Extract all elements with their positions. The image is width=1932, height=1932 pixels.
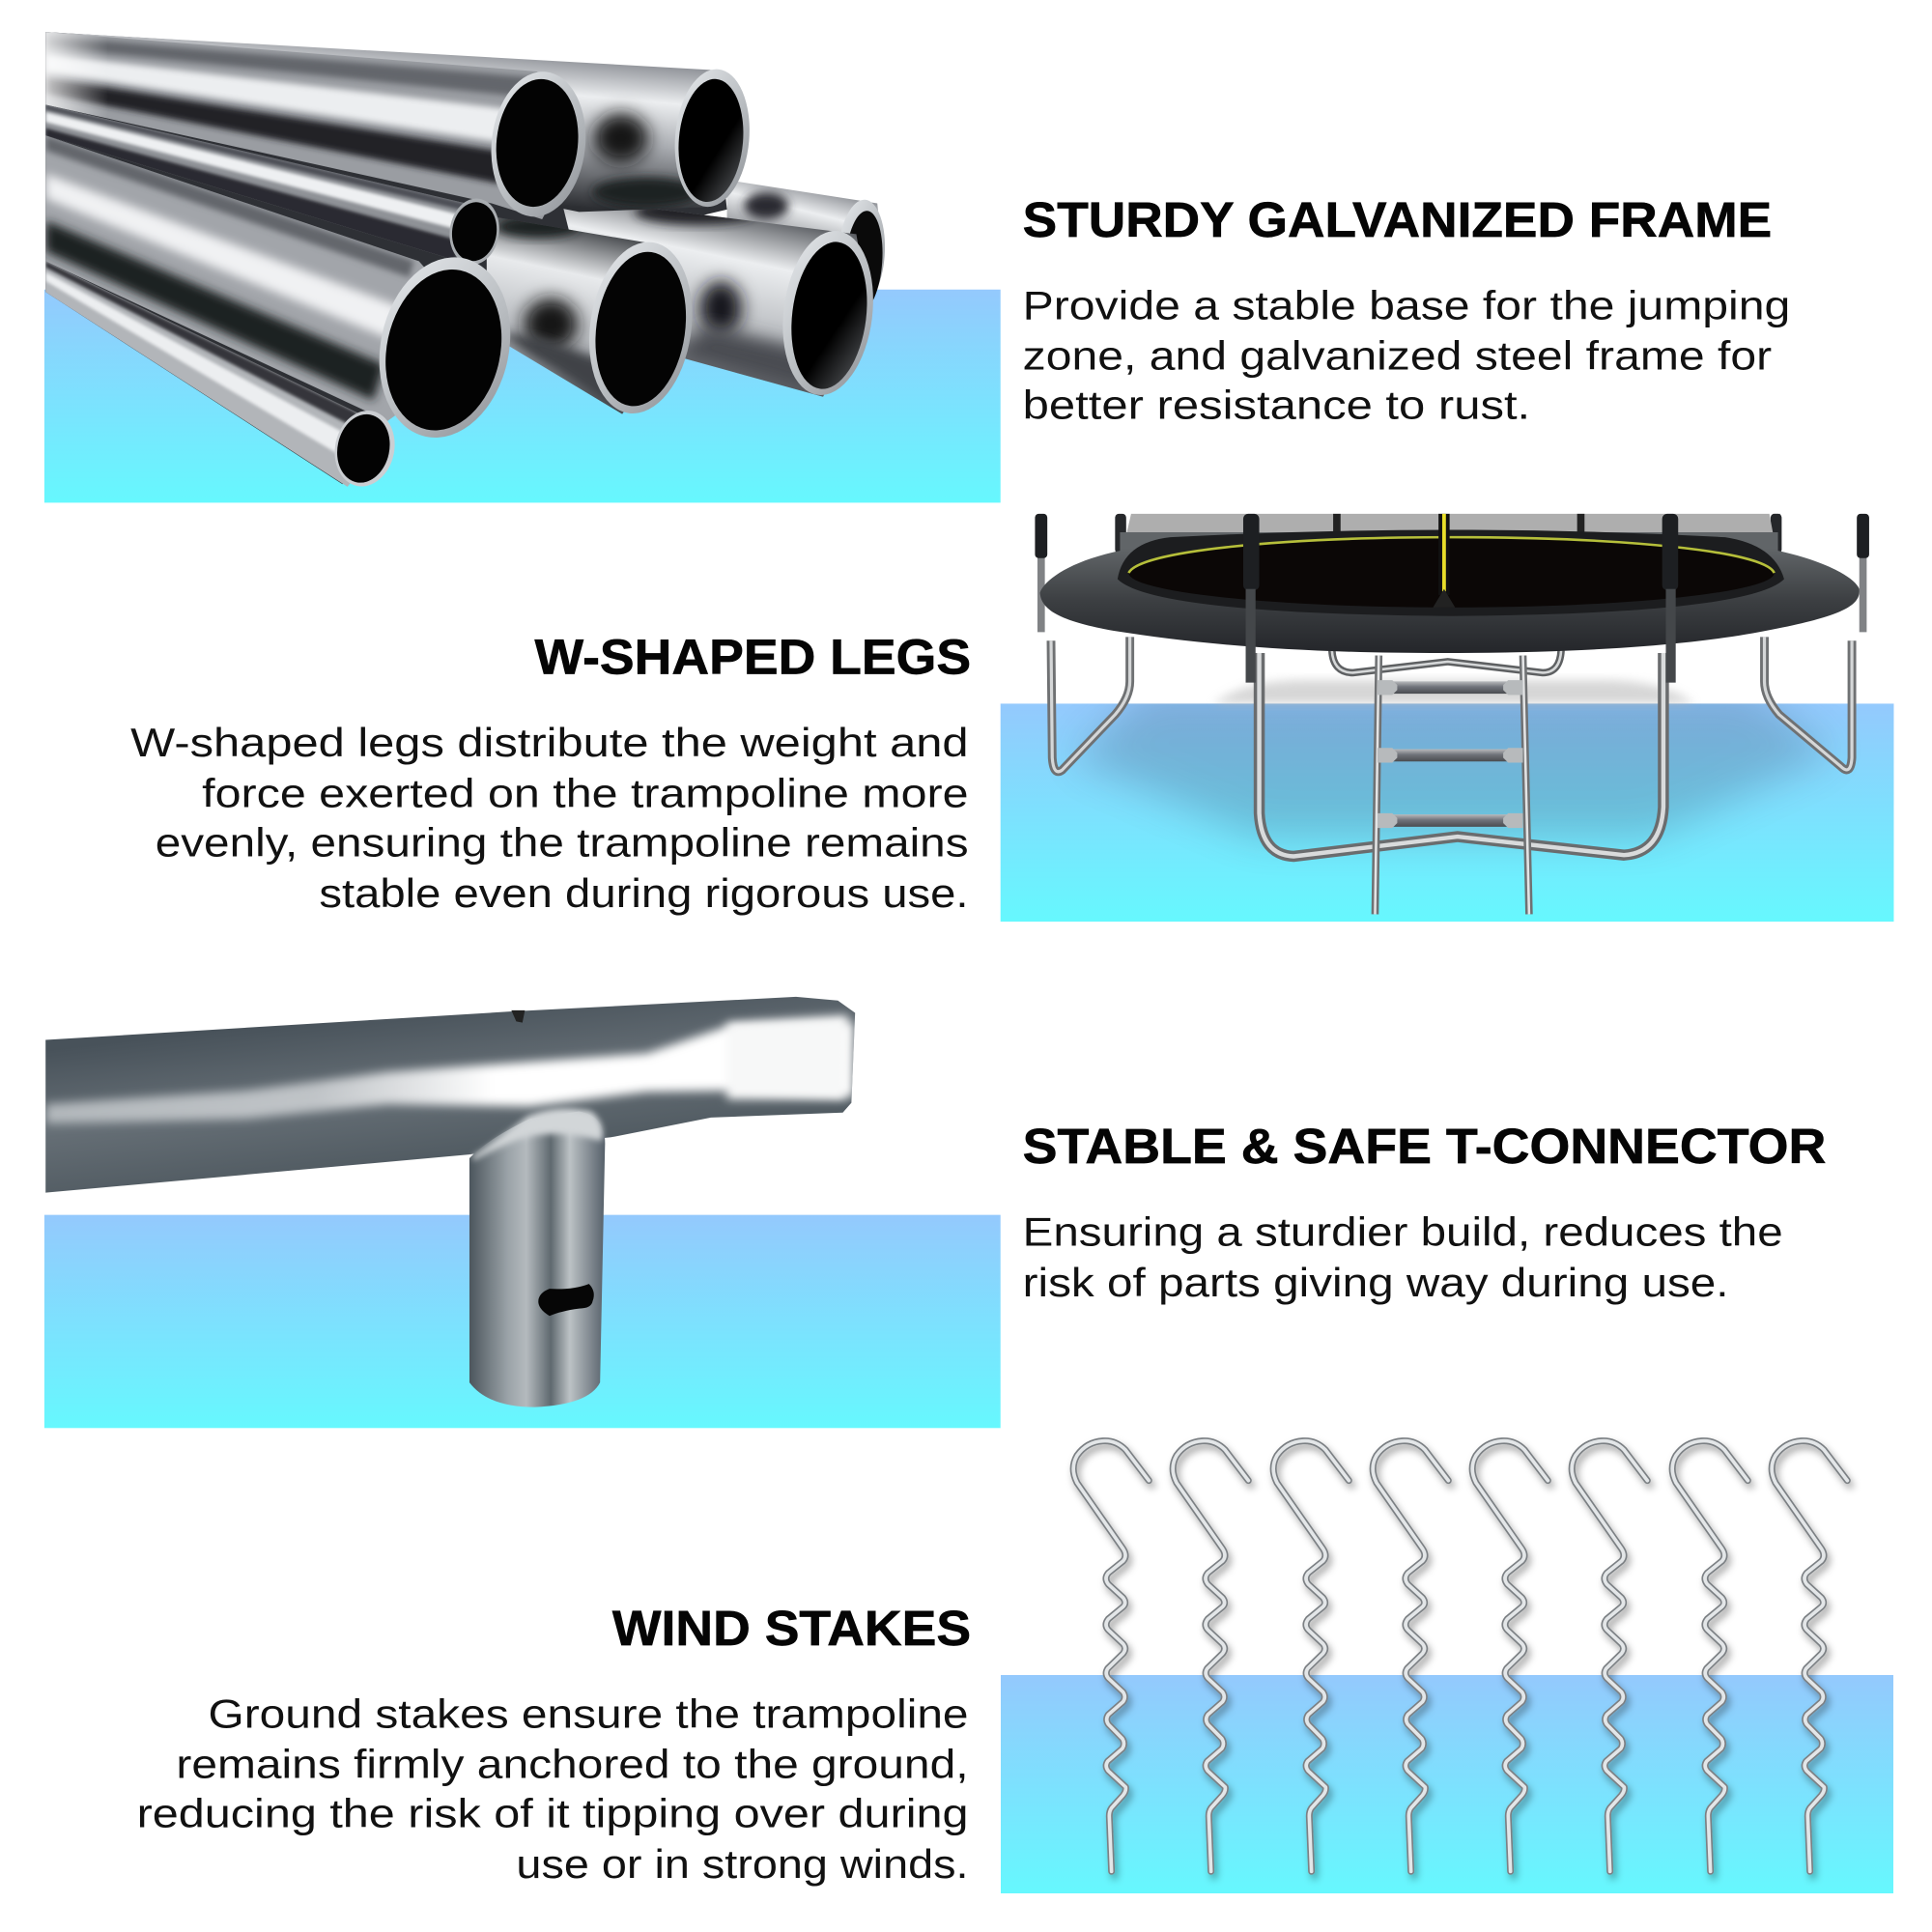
panel: t-connector image <box>44 997 1001 1428</box>
image: steel pipes <box>45 25 889 492</box>
heading: stable and safe t-connector: STABLE & SAFE T-CONNECTOR <box>1023 1119 1826 1174</box>
blue gradient backdrop <box>44 290 1001 502</box>
image: eight wind stakes <box>1073 1441 1847 1871</box>
text block: wind stakes description <box>137 1690 969 1887</box>
text block: t-connector description: risk of parts giving way during use. <box>1023 1260 1729 1305</box>
blue gradient backdrop <box>1001 1675 1893 1893</box>
text block: sturdy galvanized frame description: better resistance to rust. <box>1023 383 1530 428</box>
text block: sturdy galvanized frame description: Provide a stable base for the jumping <box>1023 282 1790 327</box>
text block: wind stakes description: use or in strong winds. <box>516 1841 969 1887</box>
panel: w-shaped legs image <box>1001 514 1893 922</box>
weld <box>473 1109 603 1161</box>
side hole <box>538 1284 594 1316</box>
blue gradient backdrop <box>1001 703 1893 922</box>
text block: t-connector description: Ensuring a sturdier build, reduces the <box>1023 1209 1783 1255</box>
text block: w-shaped legs description: force exerted on the trampoline more <box>202 770 969 815</box>
heading: wind stakes: WIND STAKES <box>612 1601 971 1656</box>
white cover above backdrop edge <box>1001 640 1893 703</box>
text block: sturdy galvanized frame description: zone, and galvanized steel frame for <box>1023 333 1772 379</box>
text block: wind stakes description: Ground stakes ensure the trampoline <box>209 1690 969 1736</box>
text block: wind stakes description: reducing the risk of it tipping over during <box>137 1791 969 1836</box>
ground shadow <box>1072 690 1835 838</box>
image: t-connector tube <box>45 997 855 1407</box>
text block: sturdy galvanized frame description <box>1023 282 1790 428</box>
panel: wind stakes image <box>1001 1441 1893 1893</box>
panel: sturdy galvanized frame image <box>44 25 1001 502</box>
heading: w-shaped legs: W-SHAPED LEGS <box>535 630 971 685</box>
text block: wind stakes description: remains firmly anchored to the ground, <box>176 1742 969 1787</box>
ground shadow upper part <box>1213 680 1694 703</box>
heading: sturdy galvanized frame: STURDY GALVANIZED FRAME <box>1023 192 1772 247</box>
text block: w-shaped legs description <box>130 720 969 916</box>
image: trampoline <box>1035 514 1869 914</box>
text block: w-shaped legs description: W-shaped legs distribute the weight and <box>130 720 969 765</box>
blue gradient backdrop <box>44 1215 1001 1428</box>
text block: w-shaped legs description: evenly, ensuring the trampoline remains <box>156 819 969 865</box>
stem tube <box>469 1112 605 1407</box>
slot notch <box>511 1010 525 1023</box>
text block: w-shaped legs description: stable even during rigorous use. <box>319 870 969 916</box>
text block: t-connector description <box>1023 1209 1783 1305</box>
